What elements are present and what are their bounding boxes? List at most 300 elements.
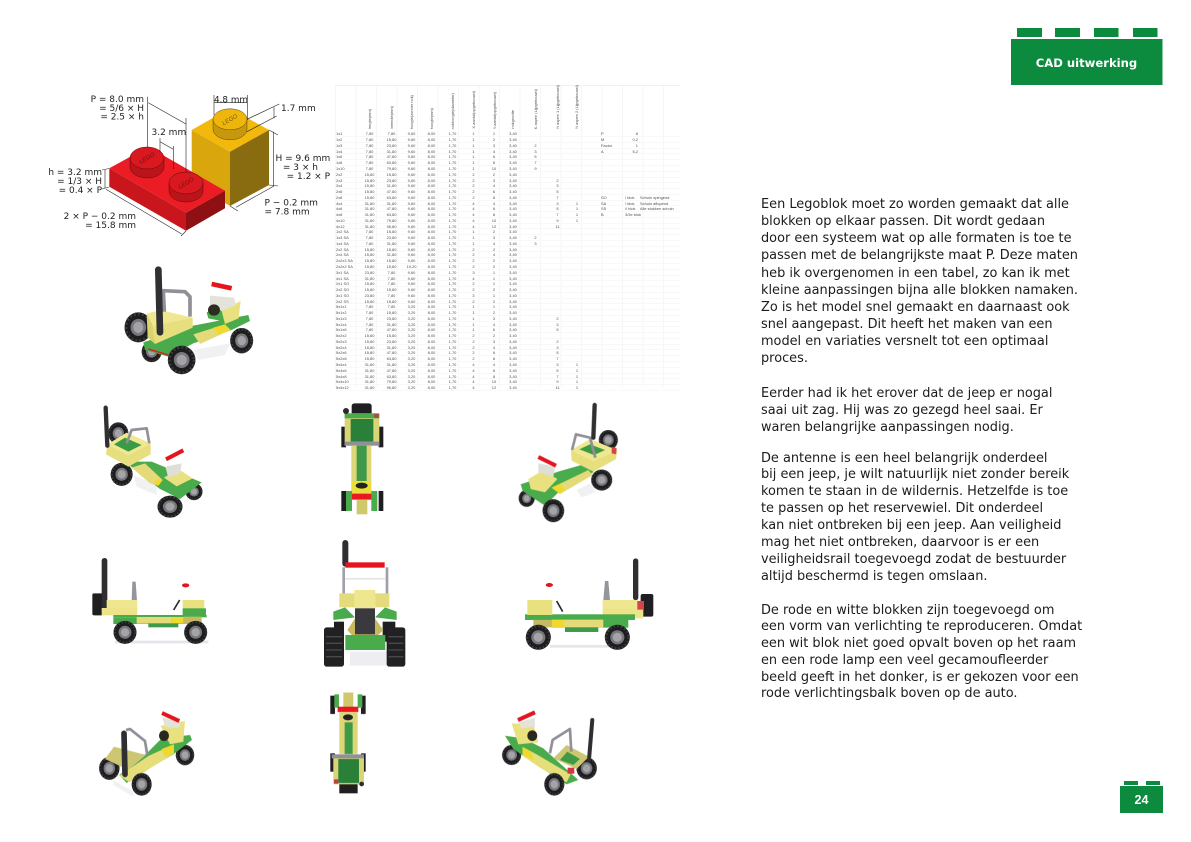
table rows: 9,60 xyxy=(408,172,415,177)
table rows: 95,80 xyxy=(387,224,396,229)
table rows: 9,60 xyxy=(408,241,415,246)
table rows: 7,80 xyxy=(366,241,373,246)
table rows: 3,40 xyxy=(509,327,517,332)
table rows: 8,00 xyxy=(428,264,435,269)
paragraph: lights xyxy=(761,602,1082,701)
dimension labels: = 7.8 mm xyxy=(264,208,310,218)
table rows: 2 xyxy=(534,235,537,240)
table rows: 1,70 xyxy=(449,137,456,142)
table rows: 12 xyxy=(492,224,496,229)
table column headers: hoogte(zonder nok) xyxy=(409,95,414,129)
table rows: 1,70 xyxy=(449,327,456,332)
table rows: 7,80 xyxy=(366,235,373,240)
table rows: 4 xyxy=(493,241,495,246)
table rows: 3 xyxy=(493,235,495,240)
table column headers: nokgrootte xyxy=(510,110,515,129)
table rows: 1 xyxy=(576,379,578,384)
table rows: 2 xyxy=(493,264,495,269)
table rows: 0,2 xyxy=(633,137,638,142)
table rows: 1,70 xyxy=(449,258,456,263)
table rows: 4 xyxy=(493,149,495,154)
dimension labels: 1.7 mm xyxy=(281,104,316,114)
table rows: 1,70 xyxy=(449,316,456,321)
table rows: 1x4 SA xyxy=(336,241,349,246)
table rows: 7 xyxy=(556,195,559,200)
jeep render: left side view xyxy=(92,558,208,644)
jeep render: rear right three quarter xyxy=(519,405,618,522)
table rows: 1,70 xyxy=(449,287,456,292)
table rows: P xyxy=(601,131,604,136)
table rows: 63,80 xyxy=(387,356,396,361)
table rows: 15,80 xyxy=(365,195,374,200)
dimension labels: = 2.5 × h xyxy=(100,112,144,122)
table rows: 1 xyxy=(493,131,495,136)
table rows: 7 xyxy=(556,212,559,217)
table rows: 79,80 xyxy=(387,379,396,384)
table rows: 15,80 xyxy=(365,345,374,350)
table rows: 15,80 xyxy=(365,264,374,269)
table rows: 1,70 xyxy=(449,172,456,177)
table rows: 3,40 xyxy=(509,368,517,373)
yellow brick: LEGO xyxy=(222,114,239,127)
table rows: 3,40 xyxy=(509,218,517,223)
table rows: 63,80 xyxy=(387,212,396,217)
table rows: \ blok xyxy=(625,201,634,206)
table rows: 63,80 xyxy=(387,160,396,165)
table rows: 2 xyxy=(472,172,475,177)
table rows: 1 xyxy=(472,154,475,159)
table rows: 3 xyxy=(493,178,495,183)
table rows: 3,40 xyxy=(509,270,517,275)
table rows: 3,40 xyxy=(509,345,517,350)
table rows: 3,40 xyxy=(509,189,517,194)
table rows: 9,60 xyxy=(408,201,415,206)
table rows: 7,80 xyxy=(366,304,373,309)
table rows: 2 xyxy=(472,195,475,200)
table column headers: hoogte(mm) xyxy=(429,108,434,129)
table rows: 9,60 xyxy=(408,299,415,304)
table rows: 23,80 xyxy=(387,339,396,344)
table rows: 8,00 xyxy=(428,304,435,309)
table rows: 8,00 xyxy=(428,333,435,338)
table rows: 8,00 xyxy=(428,229,435,234)
table rows: 4x10 xyxy=(336,218,345,223)
paragraph: model with table: model en variaties versnelt tot een optimaal xyxy=(761,334,1048,349)
table rows: 8,00 xyxy=(428,368,435,373)
table rows: 7,80 xyxy=(366,310,373,315)
table column headers: Y-aantal(opgebouwd) xyxy=(492,92,497,129)
table rows: 23,80 xyxy=(365,270,374,275)
table rows: 3,40 xyxy=(509,241,517,246)
table rows: 3,20 xyxy=(408,327,415,332)
table rows: 1 xyxy=(472,229,475,234)
table rows: 3,40 xyxy=(509,385,517,390)
table rows: 1 xyxy=(472,235,475,240)
table rows: 3,40 xyxy=(509,235,517,240)
table rows: 3,40 xyxy=(509,362,517,367)
table rows: 15,80 xyxy=(387,310,396,315)
section tab: LEGO brick shape xyxy=(1011,28,1162,85)
table rows: 1,70 xyxy=(449,247,456,252)
table rows: 4 xyxy=(472,374,475,379)
table rows: 6 xyxy=(493,154,495,159)
table rows: 1 xyxy=(472,143,475,148)
table rows: 5 xyxy=(534,154,537,159)
table rows: 3,40 xyxy=(509,143,517,148)
table rows: 3,40 xyxy=(509,310,517,315)
table rows: 7,80 xyxy=(366,229,373,234)
table rows: 7,80 xyxy=(366,149,373,154)
dimension labels: P − 0.2 mm xyxy=(264,198,318,208)
table rows: 8 xyxy=(636,131,638,136)
table rows: 9,60 xyxy=(408,287,415,292)
table rows: 31,80 xyxy=(387,241,396,246)
table rows: 3,40 xyxy=(509,333,517,338)
table rows: 2 xyxy=(472,264,475,269)
table rows: SS xyxy=(601,206,606,211)
table rows: 3,40 xyxy=(509,160,517,165)
table rows: 5 xyxy=(556,206,559,211)
table rows: 3,40 xyxy=(509,374,517,379)
table rows: M xyxy=(601,137,604,142)
table rows: 5x2x2 xyxy=(336,333,347,338)
table rows: 31,80 xyxy=(365,368,374,373)
table rows: B xyxy=(601,212,604,217)
table rows: 3x1 SO xyxy=(336,293,349,298)
table rows: 2x2x3 SA xyxy=(336,258,353,263)
table rows: 15,80 xyxy=(387,247,396,252)
table rows: 8,00 xyxy=(428,235,435,240)
table rows: 7,80 xyxy=(388,276,395,281)
table rows: 5 xyxy=(556,327,559,332)
table rows: 1x3 xyxy=(336,143,342,148)
table rows: 3 xyxy=(556,201,559,206)
table rows: 4 xyxy=(472,368,475,373)
table rows: 9,60 xyxy=(408,224,415,229)
table rows: 3,40 xyxy=(509,276,517,281)
table rows xyxy=(336,131,674,390)
paragraph: model with table xyxy=(761,197,1078,366)
table rows: 8,00 xyxy=(428,270,435,275)
table rows: 9,60 xyxy=(408,218,415,223)
table rows: 2 xyxy=(493,258,495,263)
table rows: 9,60 xyxy=(408,212,415,217)
table rows: 8,00 xyxy=(428,281,435,286)
table rows: 2x2x2 SA xyxy=(336,264,353,269)
paragraph: model with table: snel aangepast. Dit heeft het maken van een xyxy=(761,317,1053,332)
table rows: 1,70 xyxy=(449,374,456,379)
table rows: 8 xyxy=(493,160,495,165)
table rows: 8,00 xyxy=(428,374,435,379)
table rows: 31,80 xyxy=(387,362,396,367)
paragraph: antenna and safety rail: De antenne is een heel belangrijk onderdeel xyxy=(761,450,1047,466)
table rows: 8,00 xyxy=(428,322,435,327)
paragraph: antenna and safety rail: komen te staan in de wildernis. Hetzelfde is toe xyxy=(761,484,1068,499)
table rows: 1,70 xyxy=(449,362,456,367)
table rows: 31,80 xyxy=(365,385,374,390)
table rows: 31,80 xyxy=(365,379,374,384)
table rows: 1x4 xyxy=(336,149,342,154)
table rows: 3,40 xyxy=(509,206,517,211)
table rows: 1 xyxy=(493,293,495,298)
table rows: 15,80 xyxy=(387,299,396,304)
table rows: 9,60 xyxy=(408,149,415,154)
table column headers: K aspen (Lijpgebouwd) xyxy=(533,89,538,129)
table rows: 2x3 xyxy=(336,178,342,183)
red brick: LEGO xyxy=(178,177,196,191)
table rows: /\ blok xyxy=(625,206,636,211)
paragraph: model with table: proces. xyxy=(761,351,808,366)
table rows: 1 xyxy=(636,143,638,148)
table rows: 3,20 xyxy=(408,310,415,315)
table rows: 9,60 xyxy=(408,189,415,194)
table rows: 7,80 xyxy=(366,327,373,332)
table rows: 2 xyxy=(493,310,495,315)
table rows: 8,00 xyxy=(428,178,435,183)
table rows: 6 xyxy=(493,350,495,355)
table rows: 8,00 xyxy=(428,195,435,200)
table rows: 5x4x8 xyxy=(336,374,347,379)
paragraph: antenna and safety rail xyxy=(761,450,1070,584)
table rows: 1x8 xyxy=(336,160,342,165)
table column headers: N aspen 2 (Lijpgebouwd) xyxy=(574,85,579,129)
table rows: 8,00 xyxy=(428,241,435,246)
table rows: 95,80 xyxy=(387,385,396,390)
table rows: 3,40 xyxy=(509,281,517,286)
table rows: 6 xyxy=(493,327,495,332)
table rows: 5x2x3 xyxy=(336,339,347,344)
table rows: 8,00 xyxy=(428,154,435,159)
table rows: 1x2 SA xyxy=(336,229,349,234)
table rows: 1,70 xyxy=(449,270,456,275)
paragraph: model with table: kleine aanpassingen bijna alle blokken namaken. xyxy=(761,283,1078,298)
table rows: 2 xyxy=(472,299,475,304)
paragraph: model with table: blokken op elkaar passen. Dit wordt gedaan xyxy=(761,214,1045,229)
table rows: 4 xyxy=(472,224,475,229)
dimension labels: = 1/3 × H xyxy=(57,177,102,187)
table rows: 3,40 xyxy=(509,293,517,298)
table rows: 31,80 xyxy=(365,201,374,206)
table rows: 1 xyxy=(576,218,578,223)
table rows: 6 xyxy=(493,368,495,373)
table rows: 7,80 xyxy=(388,304,395,309)
table rows: 3,20 xyxy=(408,339,415,344)
table column headers: lengte(mm) xyxy=(367,109,372,129)
table rows: 4 xyxy=(493,322,495,327)
table rows: 3,20 xyxy=(408,333,415,338)
table rows: 8,00 xyxy=(428,327,435,332)
table rows: 1 xyxy=(472,149,475,154)
table rows: 1 xyxy=(472,316,475,321)
table rows: 7 xyxy=(556,374,559,379)
paragraph: antenna and safety rail: kan niet ontbreken bij een jeep. Aan veiligheid xyxy=(761,518,1061,533)
table rows: 1,70 xyxy=(449,241,456,246)
table rows: 15,80 xyxy=(365,172,374,177)
table rows: 1,70 xyxy=(449,345,456,350)
table rows: 8,00 xyxy=(428,316,435,321)
table rows: 1 xyxy=(472,241,475,246)
table rows: Schuin aflopend xyxy=(640,201,668,206)
table rows: 11 xyxy=(555,224,560,229)
table rows: 3,40 xyxy=(509,195,517,200)
table rows: 9,60 xyxy=(408,131,415,136)
table rows: 5x1x4 xyxy=(336,322,347,327)
table rows: 3,40 xyxy=(509,178,517,183)
table rows: 5x1x6 xyxy=(336,327,347,332)
table rows: 7,80 xyxy=(388,131,395,136)
table rows: 79,80 xyxy=(387,166,396,171)
table rows: 1,70 xyxy=(449,160,456,165)
table rows: 6 xyxy=(493,189,495,194)
table rows: 4 xyxy=(472,379,475,384)
table rows: 1,70 xyxy=(449,310,456,315)
table rows: 8,00 xyxy=(428,299,435,304)
table rows: / blok xyxy=(625,195,634,200)
table rows: 15,80 xyxy=(365,281,374,286)
dimension labels: 3.2 mm xyxy=(152,128,186,138)
table rows: 2 xyxy=(493,247,495,252)
table rows: 2x6 xyxy=(336,189,342,194)
table rows: 15,80 xyxy=(387,264,396,269)
table column headers: N aspen 1 (Lijpgebouwd) xyxy=(555,85,560,129)
jeep render: top view xyxy=(341,403,383,514)
table rows: 8,00 xyxy=(428,189,435,194)
table rows: 2 xyxy=(472,247,475,252)
table rows: 3 xyxy=(493,339,495,344)
table rows: 5 xyxy=(556,189,559,194)
table rows: 2 xyxy=(472,350,475,355)
paragraph: model with table: heb ik overgenomen in een tabel, zo kan ik met xyxy=(761,266,1070,281)
table rows: 15,80 xyxy=(365,247,374,252)
table rows: 1,70 xyxy=(449,143,456,148)
spreadsheet table of brick dimensions xyxy=(335,85,680,387)
table rows: 8,00 xyxy=(428,247,435,252)
table rows: 3,40 xyxy=(509,356,517,361)
table rows: 4x1 SA xyxy=(336,276,349,281)
table rows: 9,60 xyxy=(408,235,415,240)
table rows: 9 xyxy=(534,166,537,171)
table rows: 1,70 xyxy=(449,276,456,281)
table rows: 15,80 xyxy=(387,137,396,142)
red brick xyxy=(109,147,225,231)
paragraph: lights: een wit blok niet goed opvalt boven op het raam xyxy=(761,636,1076,651)
table rows: 8,00 xyxy=(428,362,435,367)
dimension labels: = 3 × h xyxy=(283,163,318,173)
table rows: 2 xyxy=(472,356,475,361)
table rows: 5x4x6 xyxy=(336,368,347,373)
table rows: 8 xyxy=(493,195,495,200)
table rows: 47,80 xyxy=(387,327,396,332)
paragraph: lights: een vorm van verlichting te reproduceren. Omdat xyxy=(761,619,1082,634)
table rows: 1,70 xyxy=(449,264,456,269)
table rows: 3,40 xyxy=(509,299,517,304)
table rows: 11 xyxy=(555,385,560,390)
table column headers: nokhoogte(diameter) xyxy=(450,93,455,129)
paragraph: lights: De rode en witte blokken zijn toegevoegd om xyxy=(761,602,1054,618)
table rows: 47,80 xyxy=(387,368,396,373)
table rows: 47,80 xyxy=(387,154,396,159)
table rows: 1,70 xyxy=(449,154,456,159)
table rows: 1,70 xyxy=(449,131,456,136)
table rows: 9 xyxy=(556,379,559,384)
table rows: 5x1x2 xyxy=(336,310,347,315)
table rows: 1,70 xyxy=(449,379,456,384)
table rows: 7,80 xyxy=(366,316,373,321)
table rows: 1 xyxy=(493,270,495,275)
table rows: 8 xyxy=(493,374,495,379)
table column headers: breedte(mm) xyxy=(389,106,394,129)
table rows: 3,40 xyxy=(509,201,517,206)
table rows: 2x2 xyxy=(336,172,342,177)
table rows: 3,40 xyxy=(509,316,517,321)
table rows: 1 xyxy=(472,137,475,142)
table rows: 15,80 xyxy=(387,333,396,338)
dimension labels: = 0.4 × P xyxy=(59,186,103,196)
table rows: 9,60 xyxy=(408,206,415,211)
table rows: 3 xyxy=(556,362,559,367)
table rows: 4 xyxy=(472,362,475,367)
table rows: 2 xyxy=(472,252,475,257)
table rows: 3,40 xyxy=(509,258,517,263)
table rows: 8,00 xyxy=(428,379,435,384)
table column headers: X-aantal(opgebouwd) xyxy=(471,91,476,129)
table rows: 31,80 xyxy=(387,201,396,206)
table rows: 8,00 xyxy=(428,310,435,315)
table rows: 3,40 xyxy=(509,339,517,344)
table rows: 1 xyxy=(472,327,475,332)
paragraph: jeep looked dull: saai uit zag. Hij was zo gezegd heel saai. Er xyxy=(761,402,1043,418)
table rows: 8,00 xyxy=(428,172,435,177)
table rows: SA xyxy=(601,201,606,206)
dimension labels: H = 9.6 mm xyxy=(276,154,330,164)
table rows: 3,40 xyxy=(509,252,517,257)
table rows: 3 xyxy=(534,149,537,154)
table rows: 3,40 xyxy=(509,264,517,269)
table rows: 15,80 xyxy=(365,299,374,304)
table rows: 5x4x4 xyxy=(336,362,347,367)
table rows: 9,60 xyxy=(408,178,415,183)
table rows: 3,40 xyxy=(509,247,517,252)
table rows: 9,60 xyxy=(408,160,415,165)
table rows: 3,40 xyxy=(509,224,517,229)
table rows: 3,20 xyxy=(408,316,415,321)
paragraph: jeep looked dull: waren belangrijke aanpassingen nodig. xyxy=(761,420,1014,434)
table rows: 4 xyxy=(493,201,495,206)
table rows: 31,80 xyxy=(387,183,396,188)
table rows: 15,80 xyxy=(387,172,396,177)
table rows: 1,70 xyxy=(449,304,456,309)
table rows: 5x4x12 xyxy=(336,385,349,390)
table rows: 31,80 xyxy=(365,206,374,211)
table rows: 7 xyxy=(534,160,537,165)
paragraph: lights: en een rode lamp een veel gecamoufleerder xyxy=(761,653,1048,668)
table rows: 2x8 xyxy=(336,195,342,200)
table rows: 7,80 xyxy=(366,131,373,136)
table rows: 2 xyxy=(472,258,475,263)
table rows: 1,70 xyxy=(449,178,456,183)
dimension labels: = 1.2 × P xyxy=(287,172,331,182)
table rows: 9,60 xyxy=(408,229,415,234)
table rows: 3,40 xyxy=(509,154,517,159)
table rows: 9,60 xyxy=(408,293,415,298)
table rows: 7,80 xyxy=(366,137,373,142)
table rows: 1,70 xyxy=(449,252,456,257)
table rows: 2 xyxy=(472,339,475,344)
table rows: 1,70 xyxy=(449,166,456,171)
table rows: 15,80 xyxy=(365,178,374,183)
table rows: 3 xyxy=(472,270,475,275)
table rows: 15,80 xyxy=(387,287,396,292)
